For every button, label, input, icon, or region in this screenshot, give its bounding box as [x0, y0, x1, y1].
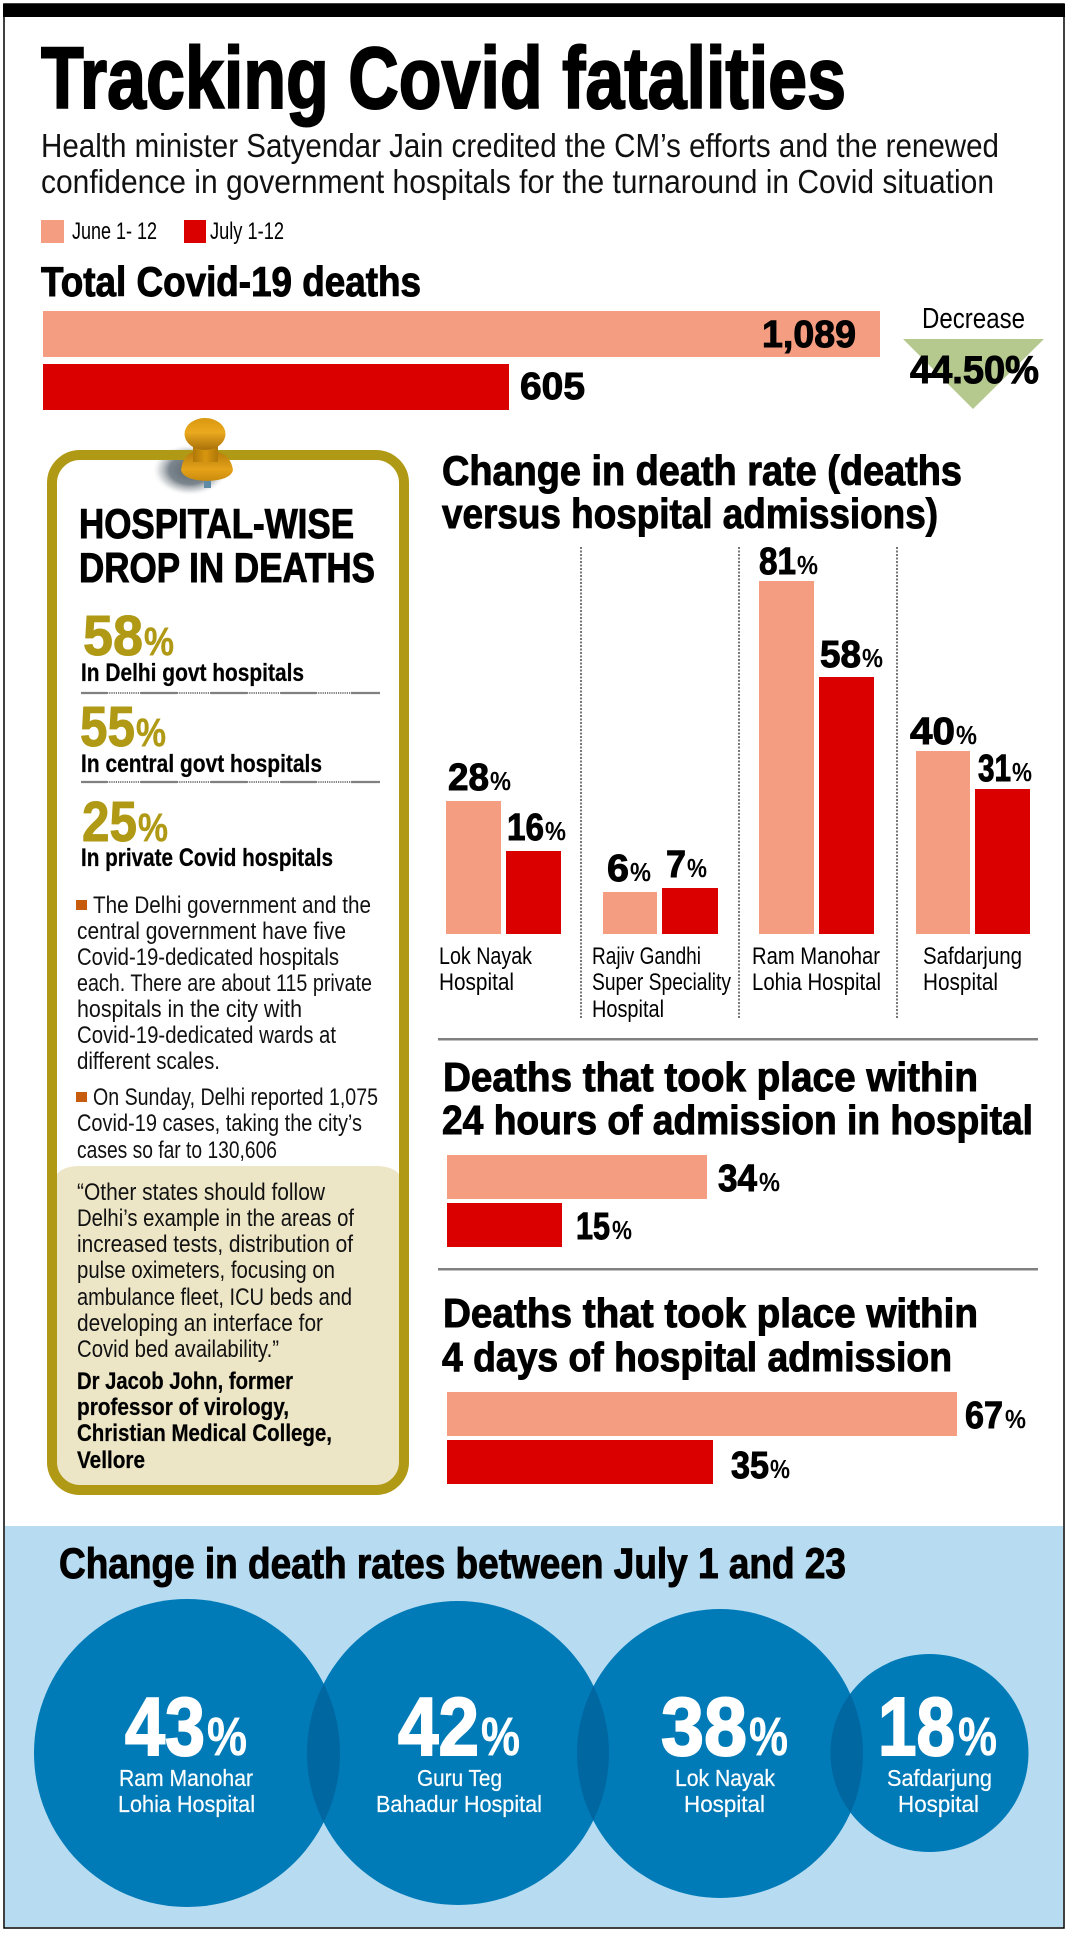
circle label: Safdarjung 18%: Hospital	[898, 1791, 979, 1817]
circle label: Ram Manohar Lohia 43%: %	[207, 1707, 247, 1767]
bar chart: Rajiv Gandhi: Hospital	[592, 996, 664, 1023]
quote background	[52, 1166, 404, 1490]
quote: increased tests, distribution of	[77, 1231, 353, 1258]
callout: decrease: Decrease	[922, 303, 1025, 335]
bar chart: Safdarjung: %	[1012, 757, 1032, 787]
circle label: Lok Nayak 38%	[661, 1680, 788, 1817]
circle label: Guru Teg Bahadur 42%: %	[481, 1707, 520, 1767]
heading: Change in death rates between July 1 and 23	[59, 1540, 846, 1588]
panel border	[52, 455, 404, 1490]
circle label: Guru Teg Bahadur 42%: 42	[398, 1680, 479, 1773]
circle label: Guru Teg Bahadur 42%: Guru Teg	[417, 1765, 502, 1791]
panel heading	[79, 500, 375, 591]
bar chart: total deaths: 1,089	[762, 314, 856, 356]
bar chart: Safdarjung: 40	[910, 711, 955, 753]
bar chart: Safdarjung: 31	[978, 748, 1011, 790]
bar chart: within 24 hours	[447, 1155, 780, 1248]
quote: Delhi’s example in the areas of	[77, 1205, 354, 1232]
bar chart: Lok Nayak: %	[490, 766, 511, 796]
bar chart: Safdarjung: Safdarjung	[923, 943, 1022, 970]
circle label: Lok Nayak 38%: Hospital	[684, 1791, 765, 1817]
circle label: Lok Nayak 38%: %	[749, 1707, 788, 1767]
bar chart: Lok Nayak: 28	[448, 757, 489, 799]
bar chart: Lok Nayak: 16	[507, 807, 544, 849]
circle label: Ram Manohar Lohia 43%	[118, 1680, 255, 1817]
circle label: Safdarjung 18%: %	[958, 1707, 997, 1767]
circle label: Guru Teg Bahadur 42%	[376, 1680, 542, 1817]
circles	[34, 1599, 1028, 1907]
stat: 25%: 25	[82, 790, 137, 854]
bullet text: hospitals: central government have five	[77, 918, 346, 945]
bar chart: Rajiv Gandhi: %	[687, 853, 707, 883]
stat: 55%: %	[136, 711, 166, 755]
stat: 58%: 58	[83, 604, 143, 668]
circle label: Ram Manohar Lohia 43%: 43	[125, 1680, 205, 1773]
stat: 55%: In central govt hospitals	[81, 750, 322, 778]
bullet text: hospitals: Covid-19-dedicated wards at	[77, 1022, 336, 1049]
bar chart: within 4 days: 35	[731, 1445, 769, 1487]
heading: deaths within 4 days: 4 days of hospital admission	[442, 1334, 952, 1380]
bar chart: within 4 days: %	[1005, 1404, 1026, 1434]
stat: 58%: %	[144, 620, 174, 664]
circle label: Safdarjung 18%: Safdarjung	[887, 1765, 992, 1791]
panel: hospital-wise drop in deaths	[52, 418, 404, 1490]
bullet text: hospitals: hospitals in the city with	[77, 996, 302, 1023]
bar chart: Ram Manohar Lohia: %	[797, 550, 818, 580]
panel heading: HOSPITAL-WISE	[79, 500, 354, 547]
heading: change in death rate: versus hospital admissions)	[442, 490, 938, 537]
heading: change in death rate	[442, 447, 962, 537]
bullet text: hospitals: Covid-19-dedicated hospitals	[77, 944, 339, 971]
bar chart: Lok Nayak	[439, 757, 566, 996]
circle label: Safdarjung 18%	[878, 1680, 997, 1817]
icon: push pin	[181, 418, 233, 488]
title: Tracking Covid fatalities	[41, 30, 846, 127]
heading: deaths within 24 hours: Deaths that took place within	[443, 1054, 978, 1100]
bullet text: cases: cases so far to 130,606	[77, 1137, 277, 1164]
legend	[41, 218, 284, 245]
bar chart: within 24 hours: 15	[576, 1206, 610, 1248]
quote: Covid bed availability.”	[77, 1336, 279, 1363]
subtitle	[41, 127, 999, 200]
bullet text: cases: Covid-19 cases, taking the city’s	[77, 1110, 362, 1137]
bar chart: within 4 days: %	[770, 1454, 790, 1484]
bar chart: within 24 hours: %	[759, 1167, 780, 1197]
quote: “Other states should follow	[77, 1179, 326, 1206]
heading: change in death rate: Change in death rate (deaths	[442, 447, 962, 494]
bar chart: Rajiv Gandhi: 6	[607, 848, 629, 890]
circle label: Lok Nayak 38%: 38	[661, 1680, 747, 1773]
bar chart: Ram Manohar Lohia: %	[862, 643, 883, 673]
bar chart: within 4 days: 67	[965, 1395, 1003, 1437]
heading: deaths within 4 days	[442, 1290, 978, 1380]
heading: deaths within 24 hours	[442, 1054, 1033, 1143]
bar chart: Ram Manohar Lohia: Lohia Hospital	[752, 969, 881, 996]
bar chart: Ram Manohar Lohia: 58	[820, 634, 861, 676]
bar chart: total deaths	[43, 311, 880, 410]
bar chart: Safdarjung: Hospital	[923, 969, 998, 996]
panel: change in death rates July 1 to 23	[5, 1526, 1063, 1927]
bar chart: within 4 days	[447, 1392, 1026, 1487]
quote: pulse oximeters, focusing on	[77, 1257, 335, 1284]
stat: 55%: 55	[80, 695, 135, 759]
callout: decrease	[903, 303, 1044, 409]
bar chart: Ram Manohar Lohia: 81	[759, 541, 796, 583]
legend: July 1-12	[210, 218, 284, 245]
bar chart: Lok Nayak: %	[545, 816, 566, 846]
quote: Christian Medical College,	[77, 1420, 332, 1447]
quote: Dr Jacob John, former	[77, 1368, 293, 1395]
stat: 58%: In Delhi govt hospitals	[81, 659, 304, 687]
quote: developing an interface for	[77, 1310, 323, 1337]
bullet text: hospitals: different scales.	[77, 1048, 220, 1075]
stat: 58%	[81, 604, 304, 687]
quote: ambulance fleet, ICU beds and	[77, 1284, 352, 1311]
quote	[77, 1179, 354, 1474]
bar chart: Lok Nayak: Lok Nayak	[439, 943, 533, 970]
bullet text: cases	[76, 1084, 378, 1164]
bullet text: hospitals: The Delhi government and the	[93, 892, 371, 919]
bar chart: Rajiv Gandhi: Super Speciality	[592, 969, 731, 996]
quote: Vellore	[77, 1447, 145, 1474]
legend: June 1- 12	[72, 218, 157, 245]
stat: 25%	[81, 790, 333, 872]
bar chart: Rajiv Gandhi: Rajiv Gandhi	[592, 943, 701, 970]
bar chart: Lok Nayak: Hospital	[439, 969, 514, 996]
bar chart: Rajiv Gandhi: %	[630, 857, 651, 887]
circle label: Guru Teg Bahadur 42%: Bahadur Hospital	[376, 1791, 542, 1817]
callout: decrease: 44.50%	[910, 349, 1039, 392]
stat: 25%: In private Covid hospitals	[81, 844, 333, 872]
bullet text: hospitals	[76, 892, 372, 1075]
quote: professor of virology,	[77, 1394, 289, 1421]
bar chart: within 24 hours: 34	[718, 1158, 757, 1200]
bar chart: within 24 hours: %	[612, 1215, 632, 1245]
bar chart: Safdarjung: %	[956, 720, 977, 750]
bullet text: cases: On Sunday, Delhi reported 1,075	[93, 1084, 378, 1111]
bar chart: Ram Manohar Lohia: Ram Manohar	[752, 943, 880, 970]
stat: 55%	[80, 695, 322, 778]
bar chart: Rajiv Gandhi	[592, 844, 731, 1023]
panel heading: DROP IN DEATHS	[79, 544, 375, 591]
pin shadow	[152, 444, 228, 496]
stat: 25%: %	[138, 806, 168, 850]
bar chart: total deaths: 605	[520, 366, 585, 408]
circle label: Ram Manohar Lohia 43%: Ram Manohar	[119, 1765, 253, 1791]
bar chart: Ram Manohar Lohia	[752, 541, 883, 996]
circle label: Lok Nayak 38%: Lok Nayak	[675, 1765, 775, 1791]
subtitle: confidence in government hospitals for the turnaround in Covid situation	[41, 163, 994, 200]
heading: deaths within 4 days: Deaths that took place within	[443, 1290, 978, 1336]
circle label: Ram Manohar Lohia 43%: Lohia Hospital	[118, 1791, 255, 1817]
heading: total deaths: Total Covid-19 deaths	[41, 258, 421, 305]
bar chart: Rajiv Gandhi: 7	[666, 844, 686, 886]
circle label: Safdarjung 18%: 18	[878, 1680, 955, 1773]
bullet text: hospitals: each. There are about 115 private	[77, 970, 372, 997]
bar chart: Safdarjung	[910, 711, 1032, 996]
